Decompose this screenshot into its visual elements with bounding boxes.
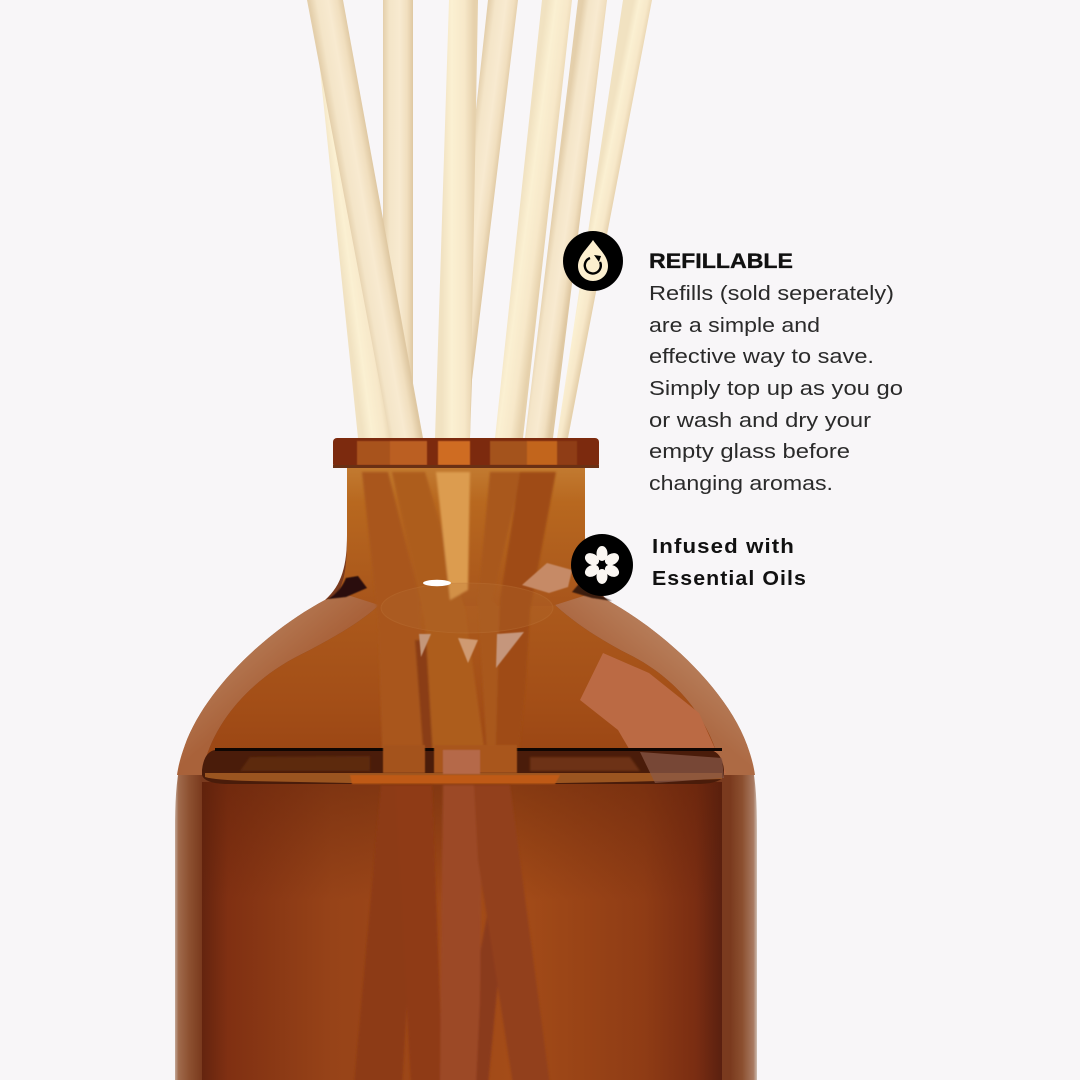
heading: REFILLABLE (649, 249, 793, 273)
refillable icon (563, 231, 623, 291)
water drop (578, 240, 608, 281)
highlight over meniscus (640, 752, 724, 783)
reflection patch on neck (522, 563, 572, 593)
body copy: effective way to save. (649, 345, 874, 368)
bottle rim (333, 438, 599, 468)
infused with essential oils label: Infused with (652, 536, 795, 558)
meniscus mottling (240, 756, 640, 771)
reeds seen through liquid (354, 785, 550, 1080)
reeds above the bottle (307, 0, 652, 438)
white specular (423, 580, 451, 586)
body copy: or wash and dry your (649, 409, 871, 432)
upper interior of bottle (202, 602, 722, 775)
infused with essential oils label (652, 536, 807, 590)
refresh arrow (585, 258, 601, 273)
body copy: changing aromas. (649, 472, 833, 495)
submerged neck ring (381, 583, 553, 633)
flare shadows (328, 576, 612, 601)
meniscus lower line (205, 773, 722, 783)
meniscus dark band (202, 750, 724, 784)
liquid top shade (202, 782, 722, 1080)
right shoulder highlight (580, 653, 726, 783)
neck (338, 468, 596, 606)
shoulder glass band (177, 590, 382, 775)
infused with essential oils label: Essential Oils (652, 568, 807, 590)
right shoulder glass band (552, 590, 755, 775)
body copy: are a simple and (649, 314, 820, 337)
body copy: empty glass before (649, 440, 850, 463)
rim reed refractions (357, 441, 577, 465)
meniscus top line (215, 748, 722, 751)
body copy: Simply top up as you go (649, 377, 903, 400)
flower petals (583, 546, 621, 584)
essential oils icon (571, 534, 633, 596)
body copy (649, 282, 903, 495)
body copy: Refills (sold seperately) (649, 282, 894, 305)
small glints below neck (419, 632, 524, 668)
amber glass bottle (175, 468, 757, 1080)
reeds seen through neck and shoulder (362, 472, 556, 775)
refillable text block (649, 249, 903, 495)
bottle silhouette (175, 468, 757, 1080)
reeds over the meniscus (350, 745, 560, 784)
liquid (202, 782, 722, 1080)
